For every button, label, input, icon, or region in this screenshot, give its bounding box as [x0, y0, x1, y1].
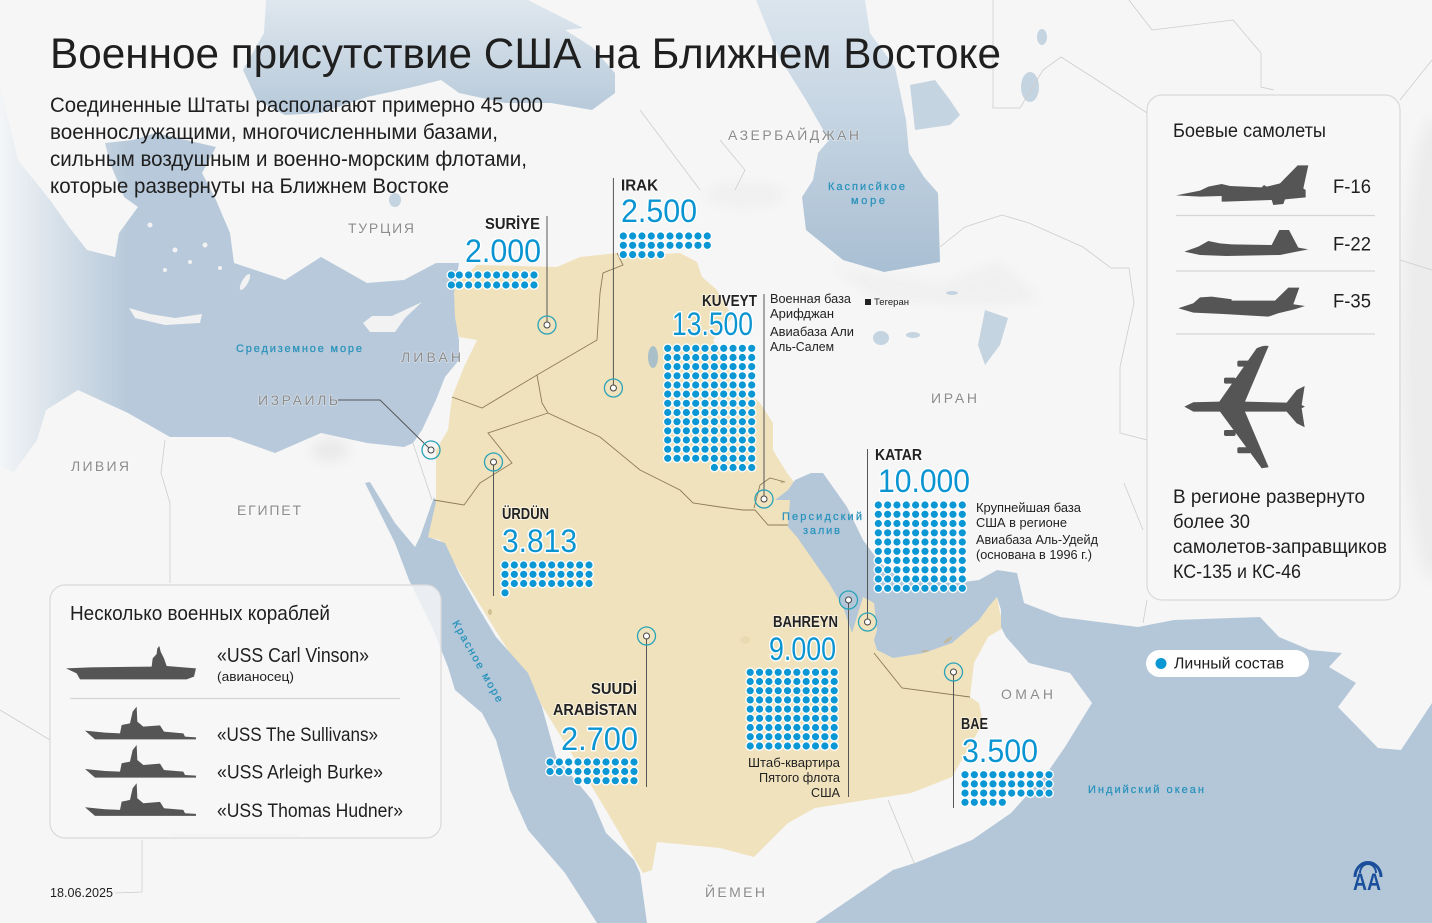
country names: ИРАН — [931, 390, 977, 406]
Kuwait: 13.500: 13.500 — [672, 306, 753, 342]
legend — [1146, 650, 1309, 677]
legend: Личный состав — [1174, 656, 1284, 672]
country names: ОМАН — [1001, 686, 1053, 702]
panel: warships — [50, 585, 441, 838]
ship: USS Carl Vinson: «USS Carl Vinson» — [217, 645, 369, 667]
intro text block: Соединенные Штаты располагают примерно 45 000 — [50, 94, 543, 117]
Red Sea — [365, 482, 647, 923]
tanker text block — [1173, 486, 1387, 583]
intro text block: сильным воздушным и военно-морским флотами, — [50, 148, 527, 171]
aircraft: F-22 — [1184, 230, 1371, 256]
logo: Anadolu Agency: AA — [1353, 869, 1381, 896]
Tehran marker: Тегеран — [874, 297, 909, 308]
aircraft: F-35 — [1178, 288, 1371, 317]
panel: combat aircraft — [1147, 95, 1400, 600]
ship: USS The Sullivans — [85, 707, 378, 746]
Black Sea — [243, 0, 615, 115]
Bahrain: 9.000: 9.000 — [769, 631, 836, 667]
ship: USS Carl Vinson — [66, 645, 369, 684]
sea names: Красное море — [449, 619, 505, 705]
Qatar: 10.000: Крупнейшая база — [976, 501, 1081, 515]
Caspian Sea — [756, 0, 940, 272]
date: 18.06.2025 — [50, 886, 113, 900]
sea names: Касписйкое — [828, 181, 905, 193]
Jordan: 3.813: 3.813 — [502, 523, 577, 559]
sea names: Индийский океан — [1088, 784, 1204, 796]
intro text block: военнослужащими, многочисленными базами, — [50, 121, 498, 144]
intro text block — [50, 94, 543, 198]
ship: USS Thomas Hudner: «USS Thomas Hudner» — [217, 801, 403, 822]
Qatar: 10.000: Авиабаза Аль-Удейд — [976, 533, 1099, 547]
country names: ЛИВИЯ — [71, 458, 129, 474]
Bahrain: 9.000: Пятого флота — [759, 771, 840, 785]
Syria: 2.000: 2.000 — [465, 233, 541, 269]
ship: USS Arleigh Burke — [85, 745, 383, 784]
Qatar: 10.000: KATAR — [875, 447, 922, 464]
sea names: залив — [803, 525, 840, 537]
coastal city specks — [488, 480, 953, 652]
sea names: Персидский — [782, 511, 862, 523]
warships heading: Несколько военных кораблей — [70, 603, 330, 625]
Kuwait: 13.500: Арифджан — [770, 307, 834, 321]
country names: ЕГИПЕТ — [237, 502, 301, 518]
country names: ЛИВАН — [401, 349, 461, 365]
Saudi Arabia: 2.700: SUUDİ — [591, 680, 637, 698]
title: Военное присутствие США на Ближнем Востоке — [50, 30, 1001, 78]
aircraft: F-22: F-22 — [1333, 234, 1371, 256]
Jordan: 3.813: ÜRDÜN — [502, 504, 549, 523]
UAE: 3.500 — [944, 663, 1049, 808]
sea names: Средиземное море — [236, 343, 362, 355]
Mediterranean Sea — [0, 85, 459, 472]
Lakes — [389, 29, 1047, 368]
ship: USS Carl Vinson: (авианосец) — [217, 669, 294, 684]
logo: Anadolu Agency — [1353, 862, 1381, 896]
Jordan: 3.813 — [484, 453, 589, 596]
Syria: 2.000 — [451, 215, 556, 334]
Bahrain: 9.000 — [748, 591, 858, 800]
Israel leader and marker — [338, 400, 440, 459]
Iraq: 2.500: 2.500 — [621, 193, 697, 229]
Kuwait: 13.500: Военная база — [770, 292, 851, 306]
Qatar: 10.000: США в регионе — [976, 516, 1067, 530]
ship: USS Arleigh Burke: «USS Arleigh Burke» — [217, 762, 383, 784]
UAE: 3.500: 3.500 — [962, 733, 1038, 769]
Persian Gulf and Indian Ocean — [775, 473, 1432, 923]
ship: USS The Sullivans: «USS The Sullivans» — [217, 725, 378, 746]
Bahrain: 9.000: Штаб-квартира — [748, 756, 840, 770]
tanker text block: В регионе развернуто — [1173, 486, 1365, 508]
Saudi-led highlighted territory — [427, 253, 1003, 873]
Qatar: 10.000: 10.000 — [878, 463, 970, 499]
country names: ЙЕМЕН — [705, 883, 765, 900]
Saudi Arabia: 2.700: ARABİSTAN — [553, 701, 637, 719]
UAE: 3.500: BAE — [961, 716, 988, 733]
Bahrain: 9.000: США — [811, 786, 841, 800]
country names: ИЗРАИЛЬ — [258, 392, 338, 408]
aircraft: tanker — [1184, 346, 1305, 468]
tanker text block: самолетов-заправщиков — [1173, 536, 1387, 558]
Qatar: 10.000 — [858, 447, 1099, 631]
country names: ТУРЦИЯ — [348, 220, 414, 236]
Kuwait: 13.500: Авиабаза Али — [770, 325, 854, 339]
intro text block: которые развернуты на Ближнем Востоке — [50, 175, 449, 198]
aircraft: F-35: F-35 — [1333, 290, 1371, 312]
Iraq: 2.500: IRAK — [621, 178, 658, 194]
ship: USS Thomas Hudner — [85, 783, 403, 822]
sea names — [236, 181, 1204, 796]
Kuwait: 13.500: Аль-Салем — [770, 340, 834, 354]
country names: АЗЕРБАЙДЖАН — [728, 126, 859, 143]
aircraft heading: Боевые самолеты — [1173, 121, 1326, 142]
sea names: море — [851, 195, 885, 207]
Bahrain: 9.000: BAHREYN — [773, 614, 838, 631]
Syria: 2.000: SURİYE — [485, 215, 540, 233]
Kuwait: 13.500: KUVEYT — [702, 293, 757, 310]
Iraq: 2.500 — [604, 178, 707, 397]
country names — [71, 126, 1053, 900]
tanker text block: более 30 — [1173, 511, 1250, 533]
aircraft: F-16: F-16 — [1333, 176, 1371, 198]
tanker text block: КС-135 и КС-46 — [1173, 561, 1301, 583]
aircraft: F-16 — [1176, 165, 1371, 205]
Kuwait: 13.500 — [668, 292, 854, 508]
Saudi Arabia: 2.700: 2.700 — [561, 721, 638, 757]
Saudi Arabia: 2.700 — [550, 627, 656, 787]
Qatar: 10.000: (основана в 1996 г.) — [976, 548, 1092, 562]
Mediterranean islands — [129, 222, 422, 332]
